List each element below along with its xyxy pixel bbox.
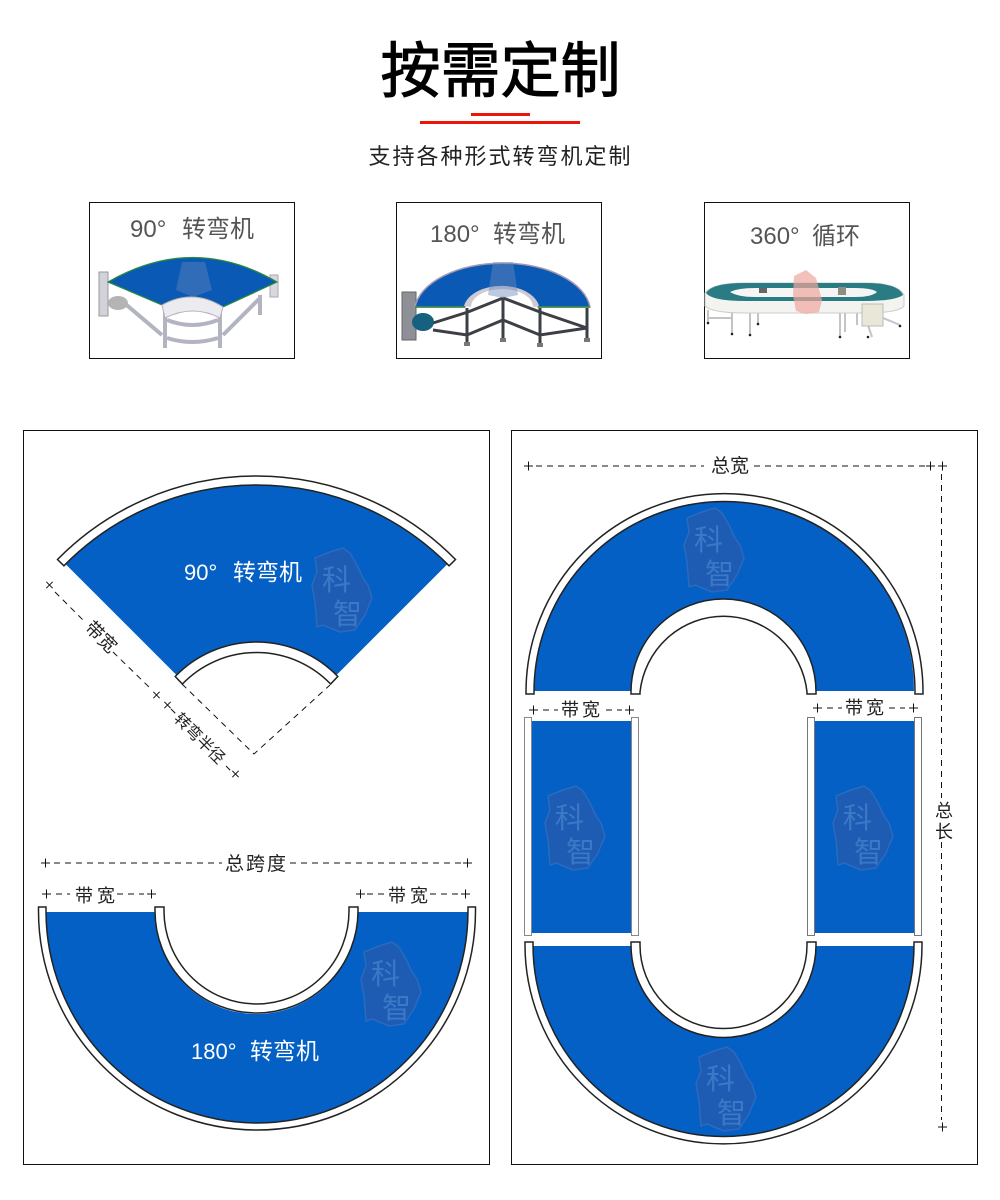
- watermark: 智: [382, 992, 411, 1025]
- dimension: right straight belt width: [813, 698, 918, 718]
- thumbnail: 180 degree conveyor: 转弯机: [493, 221, 565, 248]
- dimension: total length: 总: [935, 801, 953, 821]
- dimension: total length: [935, 462, 953, 1132]
- thumbnail: 90 degree conveyor: 90°: [130, 216, 166, 243]
- watermark: 科: [694, 524, 723, 557]
- dimension: left straight belt width: [529, 700, 634, 720]
- watermark: 科: [555, 802, 584, 835]
- thumbnail: 360 degree loop: 循环: [812, 223, 860, 250]
- watermark: [696, 1047, 756, 1131]
- panel: right loop diagram: [512, 430, 978, 1164]
- watermark: 智: [717, 1097, 746, 1130]
- inner guard rail: [175, 642, 338, 684]
- dimension: right belt width: 带宽: [388, 886, 432, 906]
- diagram: loop left straight: [524, 718, 638, 936]
- title underline: [420, 113, 580, 124]
- watermark: [361, 942, 421, 1026]
- dimension lines: 90 degree belt: [43, 579, 330, 780]
- watermark: [833, 786, 893, 870]
- watermark: 科: [843, 802, 872, 835]
- thumbnail: 360 degree loop: 360°: [750, 223, 800, 250]
- diagram: loop bottom half: [525, 942, 922, 1144]
- dimension: total width: 总宽: [711, 455, 749, 477]
- title: 按需定制: [380, 38, 620, 105]
- watermark: 智: [566, 836, 595, 869]
- dimension: right straight belt width: 带宽: [845, 698, 887, 718]
- watermark: 智: [854, 836, 883, 869]
- dimension: left belt width: [42, 886, 156, 906]
- label: 90 degree: 转弯机: [233, 559, 302, 585]
- label: turn radius: 转弯半径: [170, 710, 228, 768]
- diagram: loop top half: [526, 494, 923, 694]
- watermark: 科: [322, 564, 351, 597]
- dimension: total span: [41, 853, 472, 875]
- diagram: 90 degree belt: [58, 476, 456, 684]
- thumbnail: 360 degree loop: [704, 202, 910, 358]
- watermark: 科: [371, 958, 400, 991]
- outer guard rail: [38, 907, 476, 1130]
- thumbnail: 90 degree conveyor: [90, 202, 294, 358]
- dimension: total length: 长: [935, 822, 953, 842]
- dimension: total width: [524, 455, 935, 477]
- thumbnail: 90 degree conveyor: 转弯机: [182, 216, 254, 243]
- label: 180 degree: 180°: [191, 1039, 237, 1064]
- inner guard rail: [631, 599, 816, 694]
- outer guard rail: [526, 494, 923, 694]
- watermark: [545, 786, 605, 870]
- outer guard rail: [58, 476, 456, 566]
- panel: left diagrams: [24, 430, 490, 1164]
- dimension: left straight belt width: 带宽: [561, 700, 603, 720]
- dimension: right belt width: [356, 886, 470, 906]
- dimension: left belt width: 带宽: [75, 886, 119, 906]
- watermark: 智: [333, 598, 362, 631]
- watermark: 科: [706, 1063, 735, 1096]
- dimension: total span: 总跨度: [225, 853, 288, 875]
- watermark: [312, 548, 372, 632]
- diagram: 180 degree belt: [38, 907, 476, 1130]
- watermark: 智: [705, 558, 734, 591]
- diagram: loop right straight: [808, 718, 922, 936]
- inner guard rail: [155, 907, 358, 1013]
- thumbnail: 180 degree conveyor: [396, 202, 602, 358]
- watermark: [684, 508, 744, 592]
- label: 90 degree: 90°: [184, 560, 217, 585]
- label: belt width: 带宽: [81, 617, 121, 657]
- inner guard rail: [631, 942, 816, 1038]
- subtitle: 支持各种形式转弯机定制: [368, 144, 633, 169]
- label: 180 degree: 转弯机: [250, 1038, 319, 1064]
- thumbnail: 180 degree conveyor: 180°: [430, 221, 480, 248]
- outer guard rail: [525, 942, 922, 1144]
